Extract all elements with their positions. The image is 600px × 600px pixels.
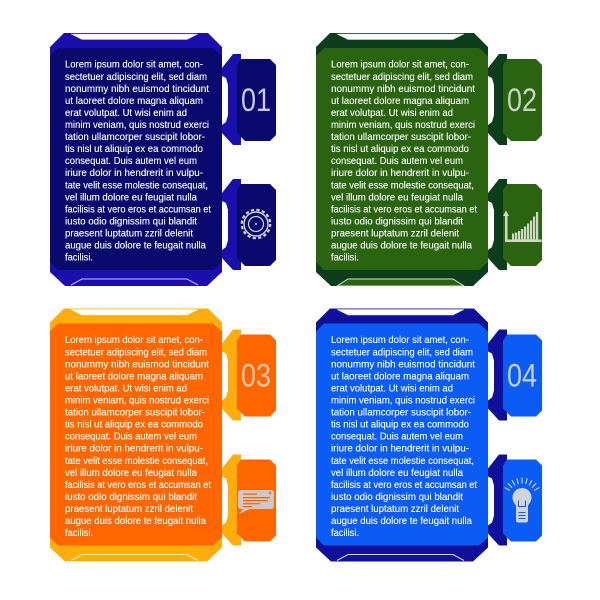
top notch bbox=[71, 310, 198, 315]
text block: facilisis at vero eros et accumsan et bbox=[331, 204, 477, 215]
text block: iriure dolor in hendrerit in vulpu- bbox=[65, 444, 203, 455]
text block: ut laoreet dolore magna aliquam bbox=[65, 96, 203, 107]
text block: minim veniam, quis nostrud exerci bbox=[331, 120, 475, 131]
bottom notch line bbox=[71, 279, 198, 285]
bottom tab connector bbox=[488, 454, 507, 546]
text block: Lorem ipsum dolor sit amet, con- bbox=[65, 60, 203, 71]
text block: ut laoreet dolore magna aliquam bbox=[331, 371, 469, 382]
panel: 01 navy bbox=[50, 33, 276, 286]
text block: vel illum dolore eu feugiat nulla bbox=[331, 192, 463, 203]
text block: tate velit esse molestie consequat, bbox=[331, 180, 474, 191]
text block: erat volutpat. Ut wisi enim ad bbox=[331, 383, 453, 394]
text block: sectetuer adipiscing elit, sed diam bbox=[331, 347, 473, 358]
text block: nonummy nibh euismod tincidunt bbox=[65, 84, 209, 95]
icon tab bbox=[237, 184, 276, 266]
text block: facilisis at vero eros et accumsan et bbox=[331, 480, 477, 491]
text block: nonummy nibh euismod tincidunt bbox=[331, 84, 475, 95]
top notch bbox=[71, 34, 198, 40]
text block: sectetuer adipiscing elit, sed diam bbox=[65, 72, 207, 83]
panel: 04 blue bbox=[316, 308, 542, 562]
text block: Lorem ipsum dolor sit amet, con- bbox=[331, 335, 469, 346]
number tab bbox=[237, 334, 276, 416]
text block: tation ullamcorper suscipit lobor- bbox=[65, 408, 205, 419]
text block: ut laoreet dolore magna aliquam bbox=[331, 96, 469, 107]
text block: tis nisl ut aliquip ex ea commodo bbox=[65, 420, 203, 431]
text block: facilisi. bbox=[65, 253, 93, 264]
text block: tate velit esse molestie consequat, bbox=[65, 456, 208, 467]
number 03: 03 bbox=[241, 358, 271, 394]
text block: sectetuer adipiscing elit, sed diam bbox=[331, 72, 473, 83]
text block: sectetuer adipiscing elit, sed diam bbox=[65, 347, 207, 358]
text block: iriure dolor in hendrerit in vulpu- bbox=[331, 168, 469, 179]
icon: light bulb bbox=[505, 478, 539, 522]
frame bbox=[316, 33, 488, 286]
frame bbox=[50, 308, 222, 562]
body bbox=[50, 48, 222, 270]
text block: consequat. Duis autem vel eum bbox=[65, 156, 197, 167]
bottom tab connector bbox=[488, 179, 507, 270]
bottom tab connector bbox=[222, 179, 241, 270]
body bbox=[316, 324, 488, 546]
top tab connector bbox=[222, 54, 241, 145]
text block: iriure dolor in hendrerit in vulpu- bbox=[331, 444, 469, 455]
frame bbox=[316, 308, 488, 562]
number tab bbox=[237, 59, 276, 141]
text block: iusto odio dignissim qui blandit bbox=[65, 216, 197, 228]
text block: facilisis at vero eros et accumsan et bbox=[65, 204, 211, 215]
text block: erat volutpat. Ut wisi enim ad bbox=[65, 108, 187, 119]
text block: praesent luptatum zzril delenit bbox=[65, 504, 193, 515]
number 01: 01 bbox=[241, 82, 271, 118]
bottom notch line bbox=[71, 554, 198, 560]
text block: tis nisl ut aliquip ex ea commodo bbox=[65, 144, 203, 155]
text block: facilisi. bbox=[65, 528, 93, 539]
text block: iusto odio dignissim qui blandit bbox=[331, 216, 463, 228]
text block: consequat. Duis autem vel eum bbox=[331, 432, 463, 443]
text block: tate velit esse molestie consequat, bbox=[65, 180, 208, 191]
text block: iriure dolor in hendrerit in vulpu- bbox=[65, 168, 203, 179]
text block: augue duis dolore te feugait nulla bbox=[331, 516, 472, 527]
icon tab bbox=[503, 184, 542, 266]
text block: tis nisl ut aliquip ex ea commodo bbox=[331, 420, 469, 431]
text block: erat volutpat. Ut wisi enim ad bbox=[331, 108, 453, 119]
number tab bbox=[503, 59, 542, 141]
text block: facilisi. bbox=[331, 528, 359, 539]
number 02: 02 bbox=[507, 82, 537, 118]
text block: Lorem ipsum dolor sit amet, con- bbox=[65, 335, 203, 346]
icon tab bbox=[237, 460, 276, 542]
text block: consequat. Duis autem vel eum bbox=[331, 156, 463, 167]
text block: consequat. Duis autem vel eum bbox=[65, 432, 197, 443]
text block: augue duis dolore te feugait nulla bbox=[65, 516, 206, 527]
text block: minim veniam, quis nostrud exerci bbox=[65, 120, 209, 131]
top tab connector bbox=[488, 330, 507, 420]
bottom notch bbox=[337, 279, 464, 286]
text block bbox=[331, 335, 477, 539]
text block bbox=[331, 60, 477, 264]
text block: tate velit esse molestie consequat, bbox=[331, 456, 474, 467]
bottom tab connector bbox=[222, 454, 241, 546]
text block: minim veniam, quis nostrud exerci bbox=[331, 396, 475, 406]
text block: iusto odio dignissim qui blandit bbox=[65, 492, 197, 503]
text block: facilisi. bbox=[331, 253, 359, 264]
top tab connector bbox=[488, 54, 507, 145]
text block: iusto odio dignissim qui blandit bbox=[331, 492, 463, 503]
text block: tation ullamcorper suscipit lobor- bbox=[331, 132, 471, 143]
top notch bbox=[337, 34, 464, 40]
text block: praesent luptatum zzril delenit bbox=[331, 504, 459, 515]
text block: vel illum dolore eu feugiat nulla bbox=[331, 468, 463, 479]
text block: tis nisl ut aliquip ex ea commodo bbox=[331, 144, 469, 155]
text block: ut laoreet dolore magna aliquam bbox=[65, 371, 203, 382]
text block: augue duis dolore te feugait nulla bbox=[331, 241, 472, 252]
text block: tation ullamcorper suscipit lobor- bbox=[65, 132, 205, 143]
body bbox=[316, 48, 488, 270]
text block: Lorem ipsum dolor sit amet, con- bbox=[331, 60, 469, 71]
number tab bbox=[503, 334, 542, 416]
frame bbox=[50, 33, 222, 286]
text block bbox=[65, 60, 211, 264]
text block: vel illum dolore eu feugiat nulla bbox=[65, 192, 197, 203]
icon: bar chart bbox=[503, 210, 542, 242]
text block: vel illum dolore eu feugiat nulla bbox=[65, 468, 197, 479]
text block: praesent luptatum zzril delenit bbox=[65, 228, 193, 240]
icon: speech bubble bbox=[238, 490, 274, 514]
text block: augue duis dolore te feugait nulla bbox=[65, 241, 206, 252]
panel: 03 orange bbox=[50, 308, 276, 562]
icon tab bbox=[503, 460, 542, 542]
top tab connector bbox=[222, 330, 241, 420]
bottom notch line bbox=[337, 554, 464, 560]
number 04: 04 bbox=[507, 358, 537, 394]
icon: gear bbox=[242, 210, 270, 238]
text block: praesent luptatum zzril delenit bbox=[331, 228, 459, 240]
text block: erat volutpat. Ut wisi enim ad bbox=[65, 383, 187, 394]
text block: tation ullamcorper suscipit lobor- bbox=[331, 408, 471, 419]
text block: nonummy nibh euismod tincidunt bbox=[65, 359, 209, 370]
top notch bbox=[337, 310, 464, 315]
text block bbox=[65, 335, 211, 539]
text block: nonummy nibh euismod tincidunt bbox=[331, 359, 475, 370]
text block: minim veniam, quis nostrud exerci bbox=[65, 396, 209, 406]
text block: facilisis at vero eros et accumsan et bbox=[65, 480, 211, 491]
body bbox=[50, 324, 222, 546]
panel: 02 green bbox=[316, 33, 542, 286]
